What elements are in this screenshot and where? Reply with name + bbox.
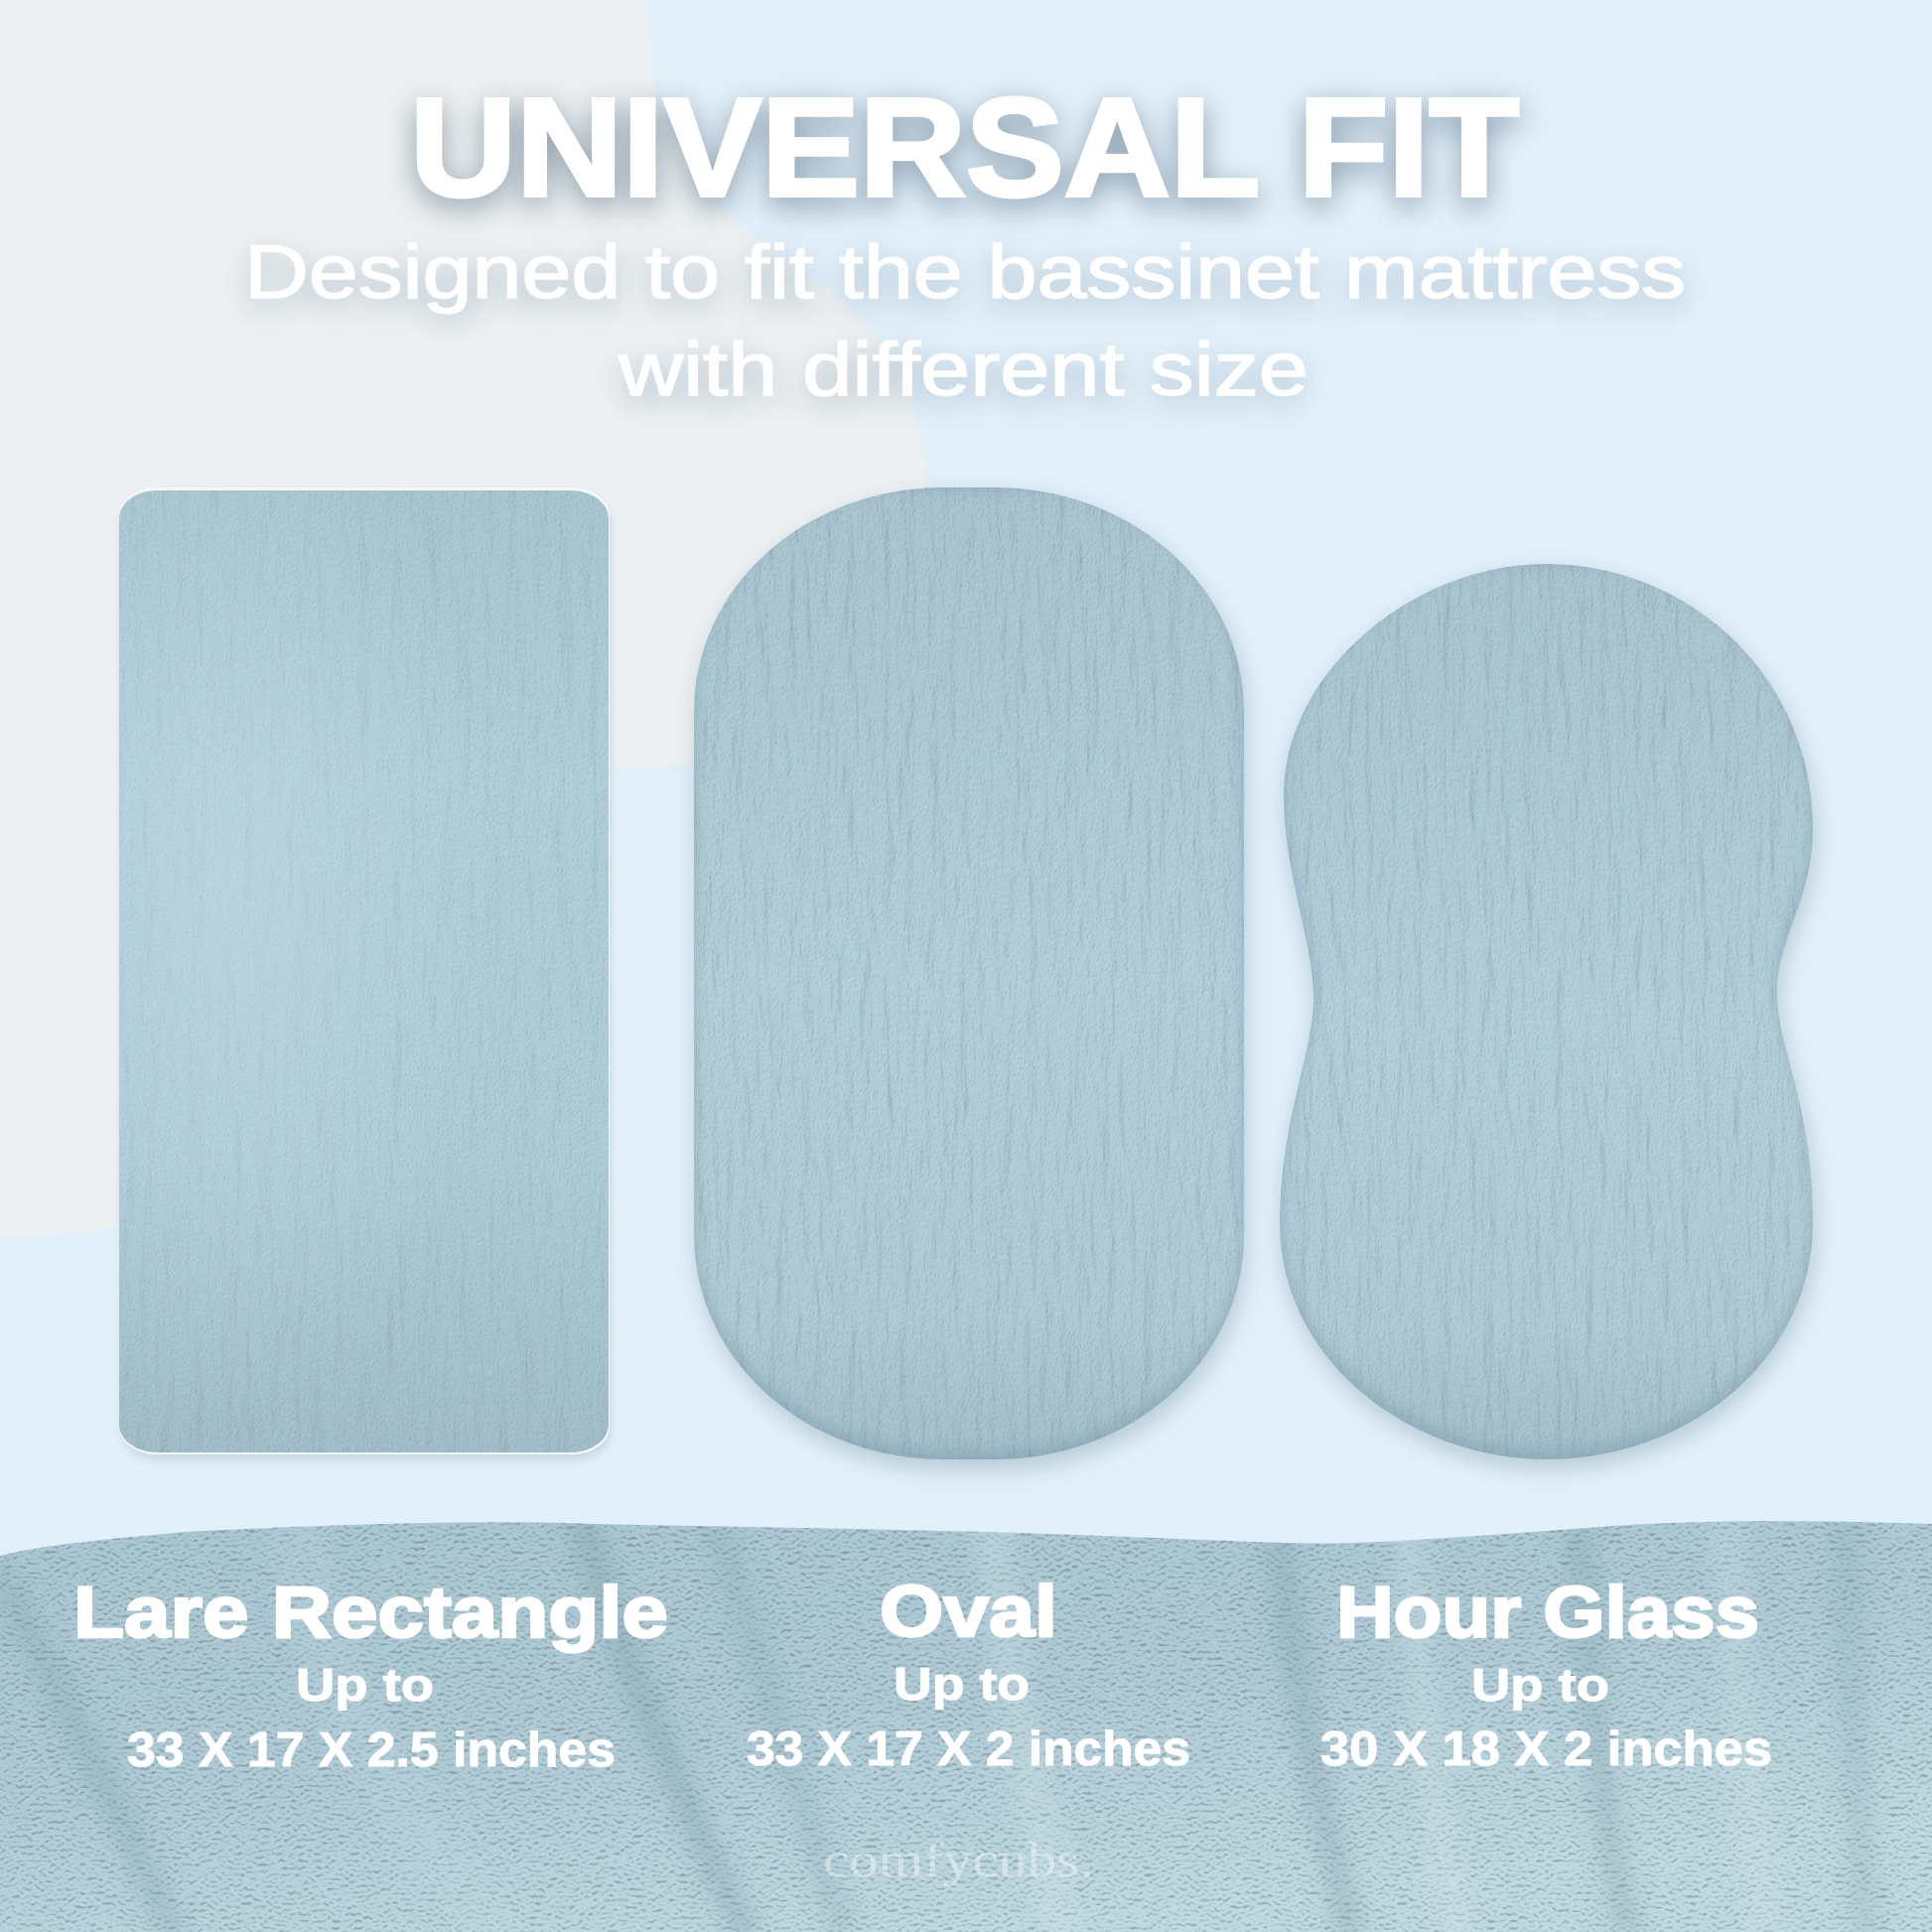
name: Lare Rectangle (73, 1573, 668, 1653)
logo watermark: comfycubs. (823, 1832, 1094, 1887)
dimensions: 33 X 17 X 2.5 inches (127, 1724, 616, 1777)
mattress: hourglass (1280, 564, 1815, 1468)
dimensions: 30 X 18 X 2 inches (1320, 1723, 1772, 1776)
title: UNIVERSAL FIT (410, 69, 1519, 225)
bottom fabric band (0, 1509, 1932, 1932)
subtitle line 2: with different size (618, 328, 1309, 412)
heading group (244, 69, 1686, 412)
up to: Up to (894, 1658, 1030, 1710)
subtitle line 1: Designed to fit the bassinet mattress (244, 230, 1686, 315)
mattress: oval (694, 487, 1246, 1469)
mattress: large rectangle (119, 487, 611, 1459)
label: large rectangle (73, 1573, 668, 1777)
label: oval (747, 1572, 1190, 1776)
label: hour glass (1320, 1573, 1772, 1776)
up to: Up to (296, 1659, 434, 1711)
up to: Up to (1471, 1659, 1609, 1711)
name: Oval (880, 1572, 1057, 1652)
dimensions: 33 X 17 X 2 inches (747, 1723, 1190, 1776)
background grey blob (0, 0, 926, 1236)
name: Hour Glass (1336, 1573, 1759, 1653)
